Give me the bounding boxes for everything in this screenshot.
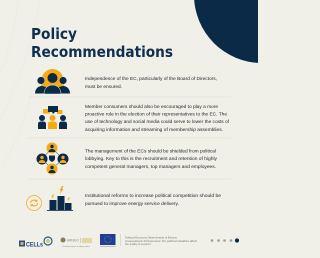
footer project text: Cooperatives' Performance: Do political variables affect bbox=[125, 239, 197, 243]
logo: CELLs: CELLs bbox=[26, 242, 44, 248]
icon: management network bbox=[36, 142, 68, 174]
text: management: The management of the ECs should be shielded from political bbox=[85, 148, 216, 154]
text: institutional reforms: pursued to improve energy service delivery. bbox=[85, 201, 179, 206]
text: member consumers: acquiring information and streaming of membership assemblies. bbox=[85, 127, 223, 132]
icon: energy bar chart bbox=[47, 186, 73, 211]
icon: board of directors group bbox=[35, 69, 70, 94]
text: independence bbox=[85, 76, 217, 89]
logo: EU flag bbox=[100, 234, 116, 247]
logo: CELLs bbox=[19, 237, 52, 248]
text: member consumers: use of technology and social media could serve to lower the costs of bbox=[85, 119, 230, 124]
pagination dots bbox=[211, 238, 239, 243]
text: institutional reforms: Institutional reforms to increase political competition should be bbox=[85, 193, 222, 198]
icon: competition cycle bbox=[26, 196, 42, 210]
logo: partner bbox=[60, 238, 92, 248]
title: Recommendations bbox=[31, 43, 173, 61]
text: member consumers: Member consumers should also be encouraged to play a more bbox=[85, 104, 219, 109]
text: management bbox=[85, 148, 218, 169]
title bbox=[31, 25, 173, 61]
footer project text bbox=[125, 236, 197, 246]
text: institutional reforms bbox=[85, 193, 222, 206]
icon: members with speech bubbles bbox=[38, 106, 67, 129]
logo: partner: ARISEO bbox=[67, 238, 79, 242]
title: Policy bbox=[31, 25, 77, 43]
text: management: lobbying. Key to this is the recruitment and retention of highly bbox=[85, 156, 218, 161]
text: member consumers bbox=[85, 104, 230, 132]
text: member consumers: proactive role in the election of their representatives to the EC. The bbox=[85, 112, 228, 117]
corner circle bbox=[194, 0, 320, 63]
text: independence: Independence of the EC, particularly of the Board of Directors, bbox=[85, 76, 217, 81]
logo: partner: Creating impact, leading reform bbox=[62, 245, 90, 248]
text: management: competent general managers, top managers and employees. bbox=[85, 164, 216, 169]
footer project text: the quality of service? bbox=[125, 242, 152, 246]
footer project text: Political Economy Determinants of Electric bbox=[125, 236, 178, 240]
text: independence: must be ensured. bbox=[85, 84, 122, 89]
